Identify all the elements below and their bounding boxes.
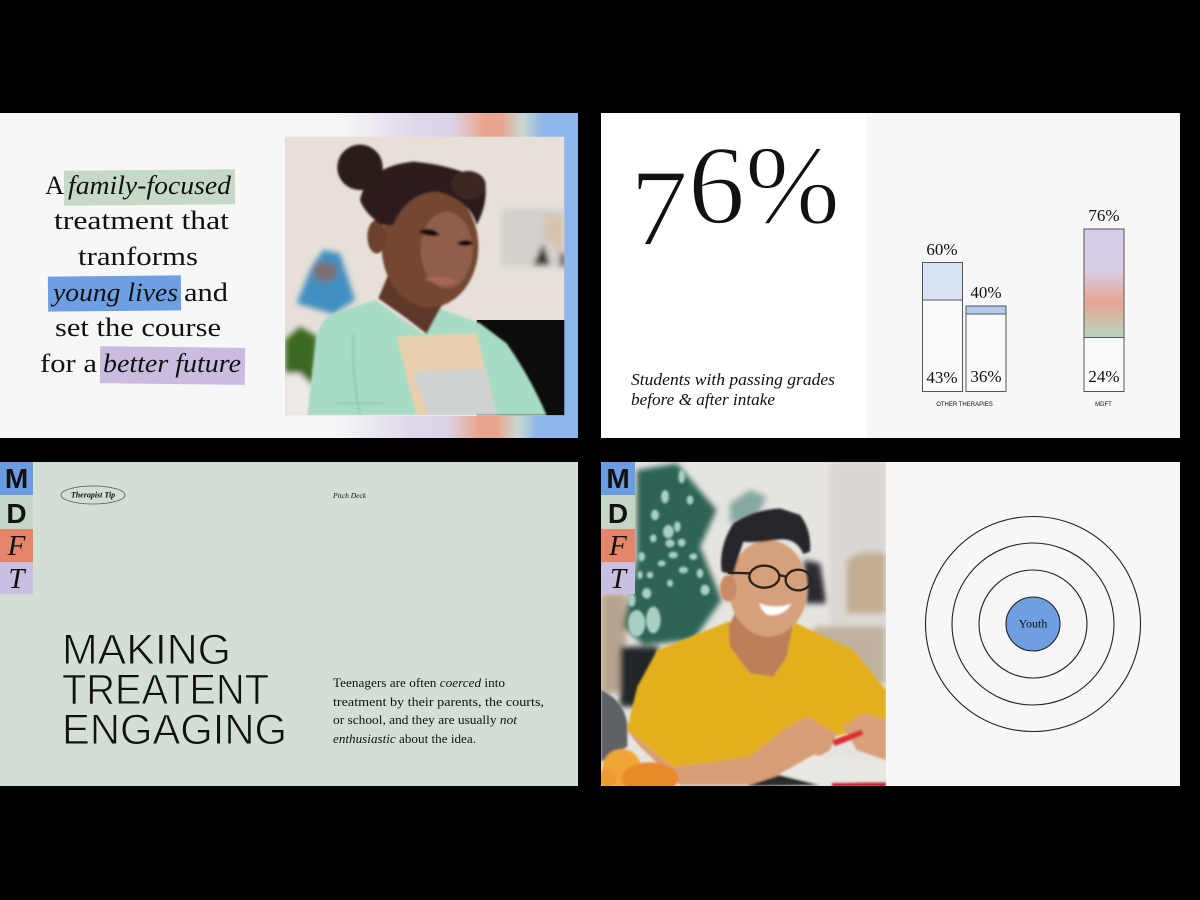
MDFT tab: D: [608, 498, 628, 529]
stat caption: [631, 370, 835, 409]
big stat: [630, 124, 840, 269]
headline statement: [40, 170, 241, 378]
glasses: [728, 566, 811, 590]
bar value labels: 24%: [1088, 367, 1120, 386]
headline statement: set the course: [55, 312, 221, 342]
stat caption: before & after intake: [631, 390, 775, 409]
bar axis labels: OTHER THERAPIES: [936, 402, 993, 408]
concentric circles diagram: [926, 516, 1140, 732]
headline statement: for a: [40, 348, 97, 378]
section title: TREATENT: [62, 666, 269, 714]
stat caption: Students with passing grades: [631, 370, 835, 389]
section title: [62, 626, 287, 754]
MDFT tab: F: [608, 530, 627, 562]
big stat: 6%: [688, 124, 840, 248]
MDFT tab: D: [6, 498, 27, 529]
bar axis labels: MDFT: [1095, 402, 1112, 408]
section title: ENGAGING: [62, 706, 287, 754]
MDFT tab: F: [7, 530, 26, 562]
panel: youth circles: [598, 462, 1180, 794]
therapist tip badge: Therapist Tip: [71, 490, 115, 500]
headline statement: and: [184, 277, 228, 307]
text highlights: [48, 169, 245, 385]
MDFT tab: [601, 462, 635, 595]
bar value labels: 60%: [926, 240, 958, 259]
section title: MAKING: [62, 626, 231, 674]
bar: MDFT 24 to 76: [1084, 229, 1124, 392]
youth circle: Youth: [1019, 616, 1047, 630]
MDFT tab: T: [610, 563, 628, 595]
bar: other therapies 36 to 40: [966, 306, 1006, 392]
bar value labels: 36%: [970, 367, 1002, 386]
therapist tip badge: [61, 486, 125, 504]
body copy: treatment by their parents, the courts,: [333, 694, 544, 709]
body copy: Teenagers are often coerced into: [333, 675, 505, 690]
bar value labels: 43%: [926, 368, 958, 387]
headline statement: young lives: [50, 277, 178, 307]
headline statement: treatment that: [54, 205, 230, 235]
big stat: 7: [630, 147, 688, 269]
body copy: [333, 675, 544, 746]
bar value labels: [926, 206, 1120, 387]
MDFT tab: M: [606, 463, 630, 494]
headline statement: family-focused: [68, 170, 232, 200]
bar value labels: 40%: [970, 283, 1002, 302]
MDFT tab: M: [5, 463, 28, 494]
headline statement: tranforms: [78, 241, 198, 271]
body copy: enthusiastic about the idea.: [333, 731, 476, 746]
panel: family-focused statement: [0, 113, 578, 438]
headline statement: better future: [103, 348, 241, 378]
panel: making treatment engaging: [0, 462, 578, 786]
bar value labels: 76%: [1088, 206, 1120, 225]
youth circle: [1006, 597, 1060, 651]
headline statement: A: [45, 170, 64, 200]
panel: 76% statistic and bar chart: [601, 113, 1180, 438]
bar chart: [922, 229, 1124, 392]
photo: girl holding books: [285, 137, 565, 417]
gradient frame: [280, 113, 578, 438]
bar: other therapies 43 to 60: [922, 262, 962, 392]
pitch deck label: Pitch Deck: [332, 491, 367, 500]
MDFT tab: T: [8, 563, 26, 595]
bar axis labels: [936, 402, 1112, 408]
MDFT tab: [0, 462, 33, 595]
body copy: or school, and they are usually not: [333, 712, 517, 727]
photo: smiling student: [598, 462, 886, 794]
